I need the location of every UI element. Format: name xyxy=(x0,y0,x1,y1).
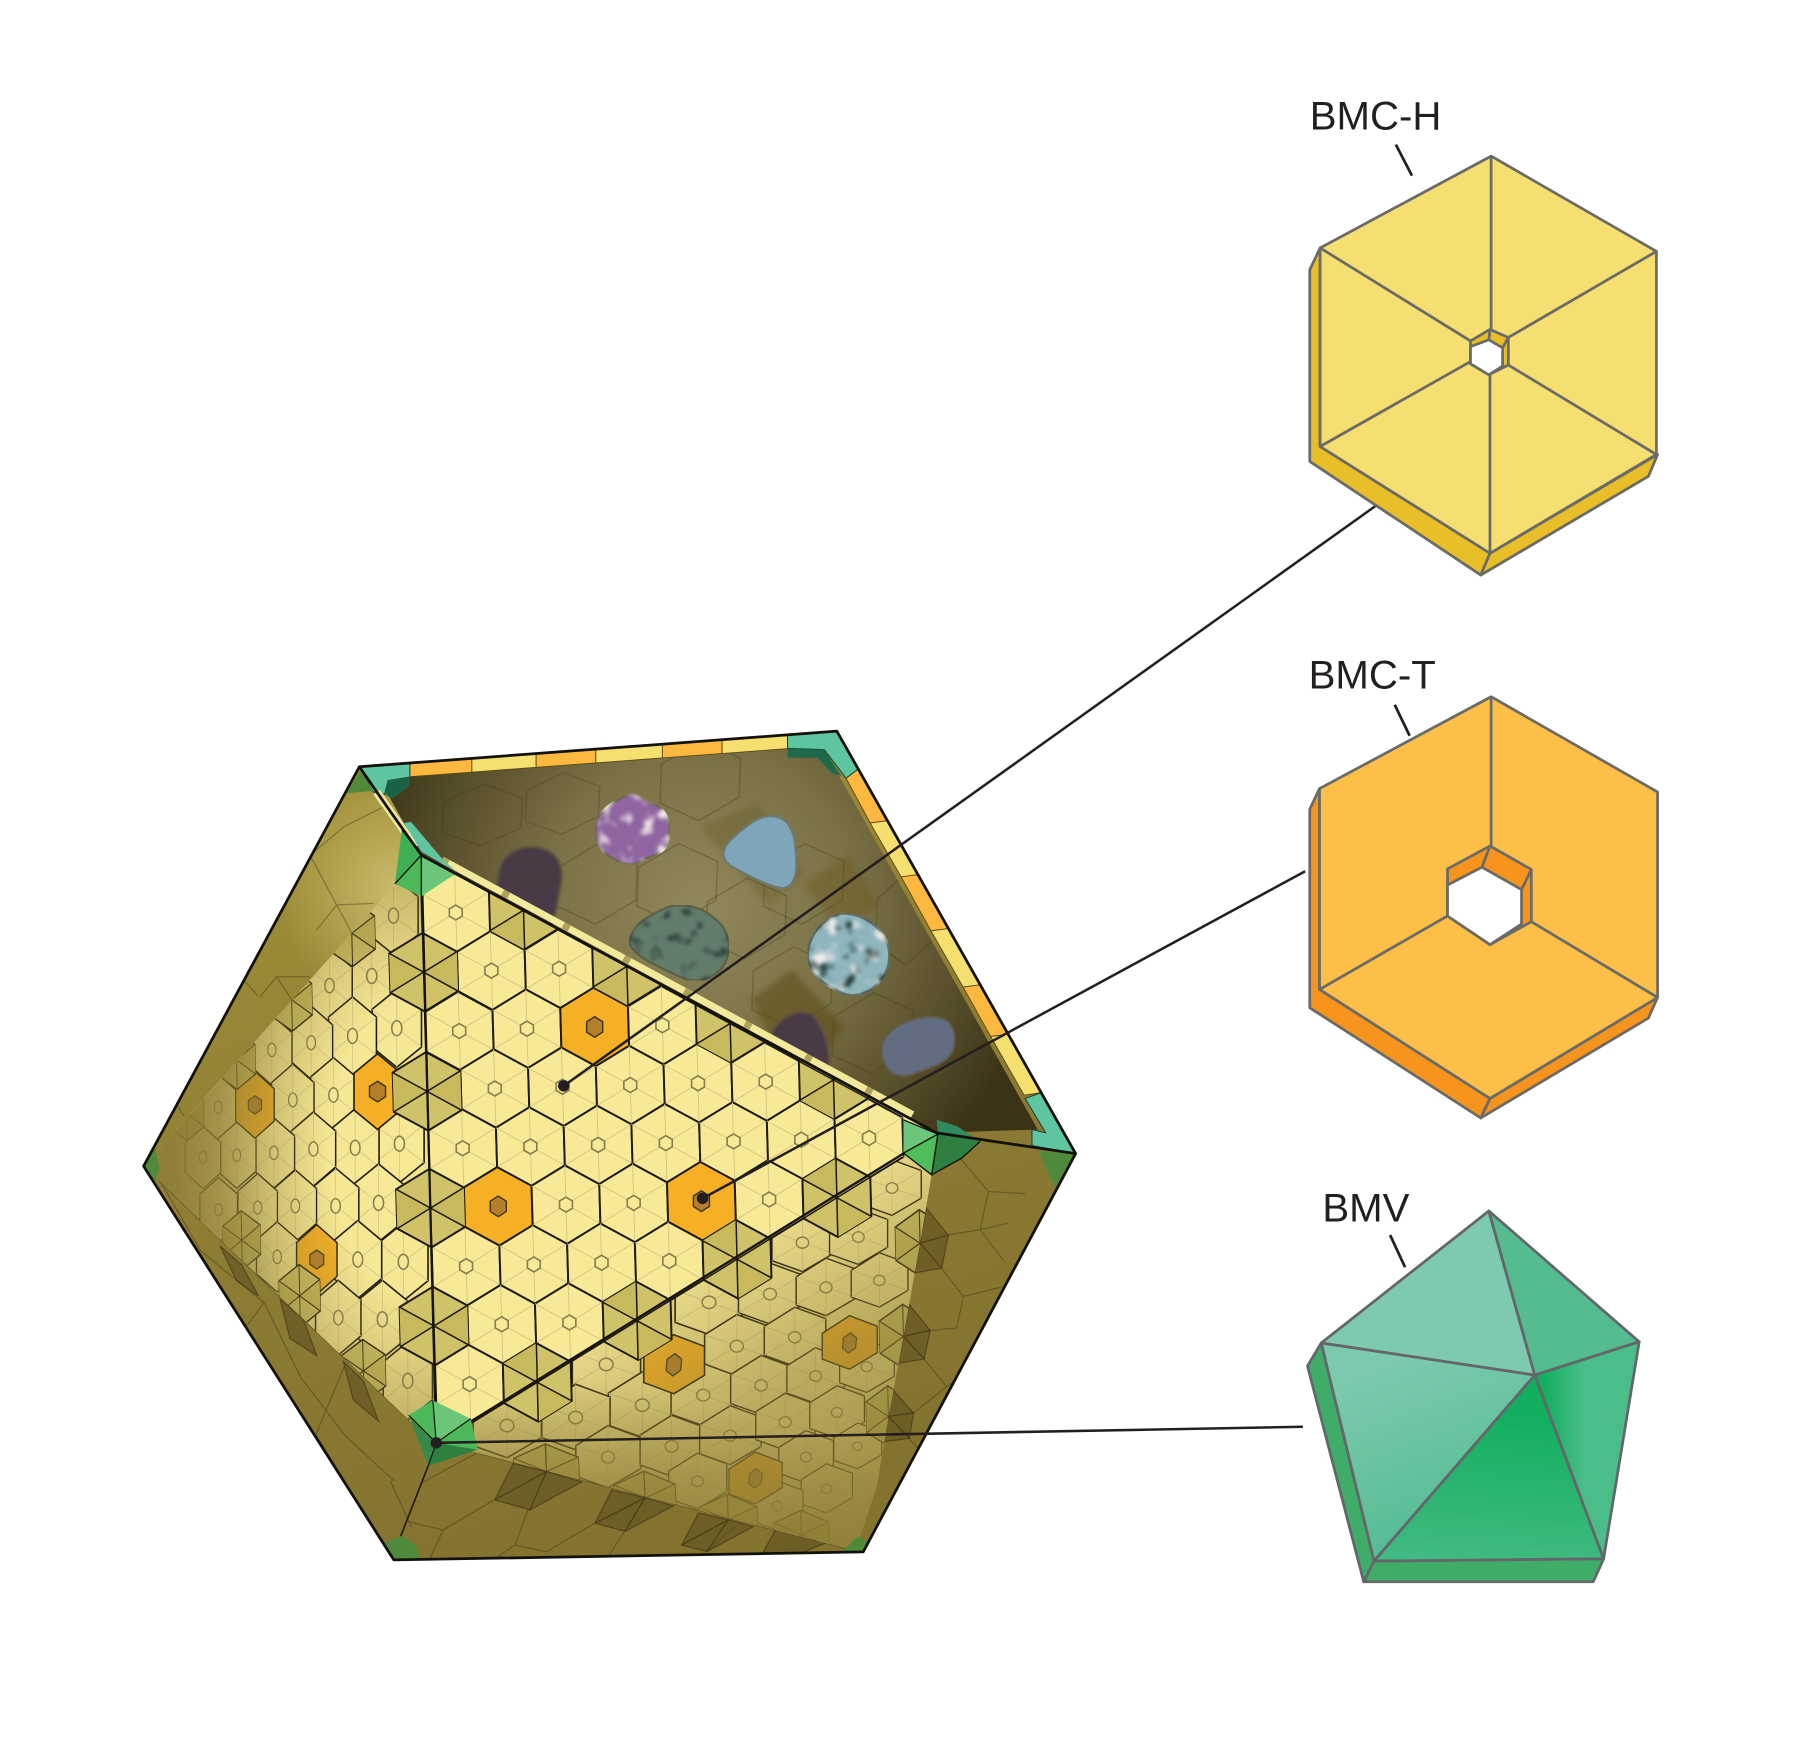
left shell face with hexamers xyxy=(144,877,436,1443)
shell wall rim segments xyxy=(410,735,1041,1095)
label: BMV xyxy=(1322,1185,1410,1267)
label: BMC-H xyxy=(1310,94,1441,176)
rim corner: right pentamer xyxy=(1025,1093,1076,1188)
main bright face with hexamers xyxy=(389,855,937,1443)
pentamer at right of main face xyxy=(903,1120,980,1175)
pentamer at top of main face xyxy=(395,822,456,896)
rim corner: top right pentamer xyxy=(788,731,858,778)
icon: BMC-T hexamer xyxy=(1310,697,1658,1118)
rim corner: top left pentamer xyxy=(347,763,410,799)
shell silhouette xyxy=(144,731,1076,1560)
cargo: dark purple capsule xyxy=(494,846,564,925)
figure: microcompartment shell and shell proteins xyxy=(142,102,1659,1584)
label: BMC-T xyxy=(1309,653,1436,736)
interior back wall hexagons xyxy=(442,740,938,1073)
faint pentamers at silhouette corners xyxy=(144,1148,868,1560)
cargo: slate rounded particle xyxy=(881,1017,955,1076)
faint rear structure on the outer shell band xyxy=(144,781,1025,1558)
label: BMV: BMV xyxy=(1322,1185,1410,1230)
cut edge pale band xyxy=(377,792,913,1115)
cargo: green particle xyxy=(629,905,729,980)
cargo: blue rounded triangle xyxy=(723,816,796,888)
cargo: purple particle xyxy=(595,793,670,864)
label: BMC-T: BMC-T xyxy=(1309,653,1436,698)
cargo: second dark purple capsule xyxy=(769,1012,829,1067)
pentamer at bottom of main face xyxy=(409,1400,478,1466)
icon: BMV pentamer xyxy=(1307,1211,1639,1582)
label: BMC-H: BMC-H xyxy=(1310,94,1441,139)
leader line: BMC-H xyxy=(558,506,1375,1092)
leader line: BMV xyxy=(431,1427,1303,1449)
leader line: BMC-T xyxy=(697,871,1305,1204)
shell illustration: cut-away icosahedron xyxy=(144,731,1076,1560)
shell outline xyxy=(144,731,1076,1560)
shell interior with enzyme cargo xyxy=(382,740,1038,1133)
cargo: teal white particle xyxy=(808,914,889,995)
lower right shell face with hexamers xyxy=(444,1154,932,1548)
icon: BMC-H hexamer xyxy=(1310,156,1658,575)
